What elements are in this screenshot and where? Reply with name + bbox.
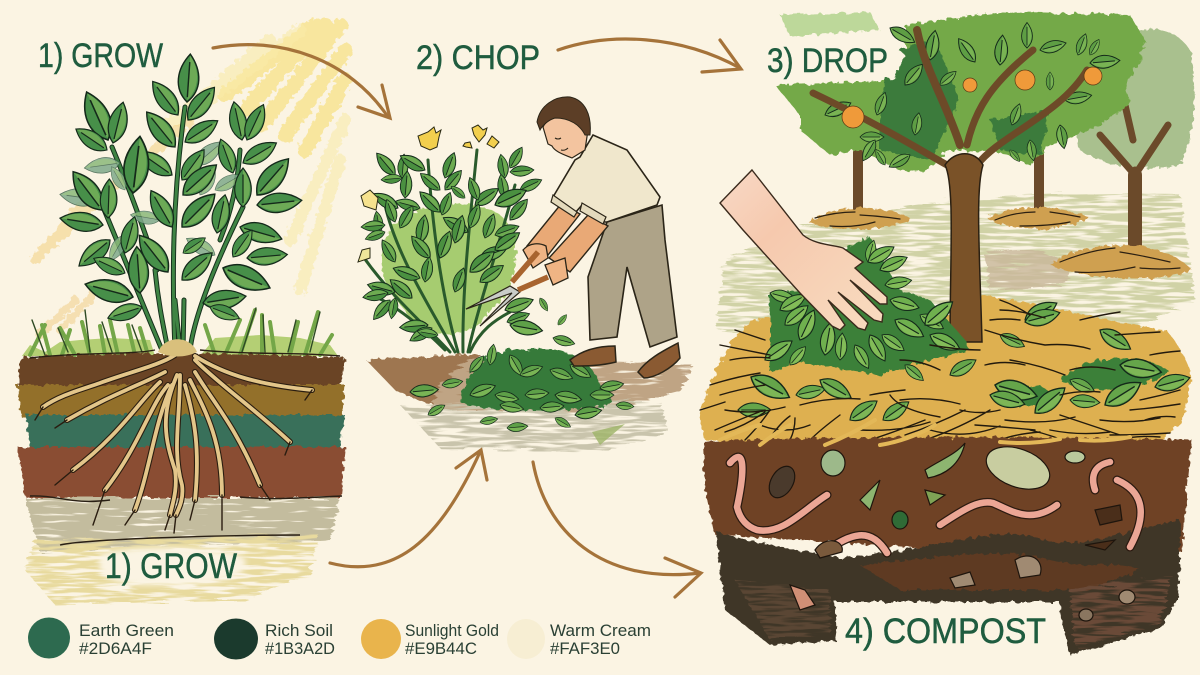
boots	[570, 343, 680, 378]
main canopy	[775, 12, 1145, 172]
swatch: Warm Cream: Warm Cream	[550, 622, 651, 640]
person	[466, 97, 680, 378]
soil	[703, 437, 1192, 655]
back tree trunks	[858, 105, 1168, 250]
swatch: Sunlight Gold	[361, 619, 499, 659]
plant leaves	[59, 53, 303, 325]
bush underlay	[381, 204, 516, 334]
grass	[22, 308, 338, 356]
soil organisms and debris	[790, 439, 1135, 621]
cream patch behind label	[760, 35, 905, 82]
back tree canopy right	[1077, 29, 1194, 168]
swatch: Warm Cream	[507, 619, 651, 659]
swatch: Earth Green: Earth Green	[79, 622, 174, 640]
arrow: grow to chop	[213, 45, 390, 118]
mulch ring straw	[815, 212, 1180, 272]
ground patch tan	[430, 358, 692, 412]
straw lines	[700, 300, 1180, 445]
label clearing	[99, 548, 246, 585]
label clearing	[835, 602, 1060, 655]
arrow: chop to compost	[533, 462, 701, 597]
beetle	[764, 462, 800, 502]
pale streak band	[25, 535, 320, 605]
soil straw fringe	[720, 420, 1130, 445]
mulch leaves	[738, 296, 1192, 426]
shirt	[553, 135, 660, 222]
ground brown shadows	[985, 249, 1069, 290]
face details	[555, 138, 568, 150]
swatch: Rich Soil	[214, 618, 335, 660]
mulch rings	[808, 207, 1192, 278]
arms	[527, 204, 608, 272]
clippings pile	[460, 349, 612, 410]
heading: 4) COMPOST: 4) COMPOST	[845, 612, 1046, 651]
main trunk	[945, 154, 983, 342]
heading: 3) DROP: 3) DROP	[767, 42, 888, 80]
bush leaves	[361, 145, 544, 345]
heading: 2) CHOP: 2) CHOP	[416, 39, 540, 77]
panel: drop	[700, 12, 1195, 446]
hair	[537, 97, 590, 135]
pile leaves	[761, 239, 963, 371]
ground patch brown	[366, 354, 480, 405]
oranges	[842, 67, 1102, 128]
panel: compost	[703, 420, 1192, 655]
swatch: Earth Green: #2D6A4F	[79, 640, 152, 658]
leaf pile patches	[770, 237, 1170, 408]
heading: 1) GROW top: 1) GROW	[38, 37, 163, 75]
worms	[730, 457, 1141, 553]
hands	[523, 244, 568, 285]
swatch: Rich Soil: Rich Soil	[265, 622, 333, 640]
sun rays	[35, 25, 345, 335]
soil layers	[16, 354, 346, 498]
plant pale back leaves	[59, 136, 244, 264]
trousers	[588, 205, 677, 347]
roots	[35, 355, 312, 533]
strata lines	[30, 350, 342, 545]
heading: 1) GROW lower: 1) GROW	[105, 547, 237, 586]
branches	[813, 30, 1087, 165]
worm outlines	[730, 457, 1141, 553]
worm bodies	[730, 457, 1141, 553]
shears	[466, 252, 548, 326]
arrow: chop to drop	[558, 39, 741, 72]
swatch: Sunlight Gold: Sunlight Gold	[405, 622, 499, 640]
shirt cuffs	[551, 195, 606, 224]
panel: grow	[16, 53, 346, 605]
bush stems	[362, 150, 515, 352]
swatch: Warm Cream: #FAF3E0	[550, 640, 620, 658]
swatch: Earth Green	[28, 618, 174, 658]
arrow: lower grow to chop	[330, 450, 487, 567]
legend	[28, 618, 651, 660]
swatch: Sunlight Gold: #E9B44C	[405, 640, 477, 658]
grass patch	[592, 424, 625, 445]
plant stems	[103, 107, 243, 350]
lower soil streaks	[735, 575, 1172, 648]
clipped leaves	[409, 294, 634, 432]
plant crown	[158, 339, 197, 356]
straw mulch	[700, 295, 1191, 446]
panel: chop	[358, 97, 692, 452]
flowers	[358, 125, 499, 262]
orchard ground	[718, 194, 1195, 345]
hand	[720, 170, 887, 330]
pale subsoil	[25, 498, 340, 552]
head	[543, 116, 588, 158]
pale scribbles	[400, 400, 668, 452]
swatch: Rich Soil: #1B3A2D	[265, 640, 335, 658]
canopy leaves	[822, 22, 1120, 171]
